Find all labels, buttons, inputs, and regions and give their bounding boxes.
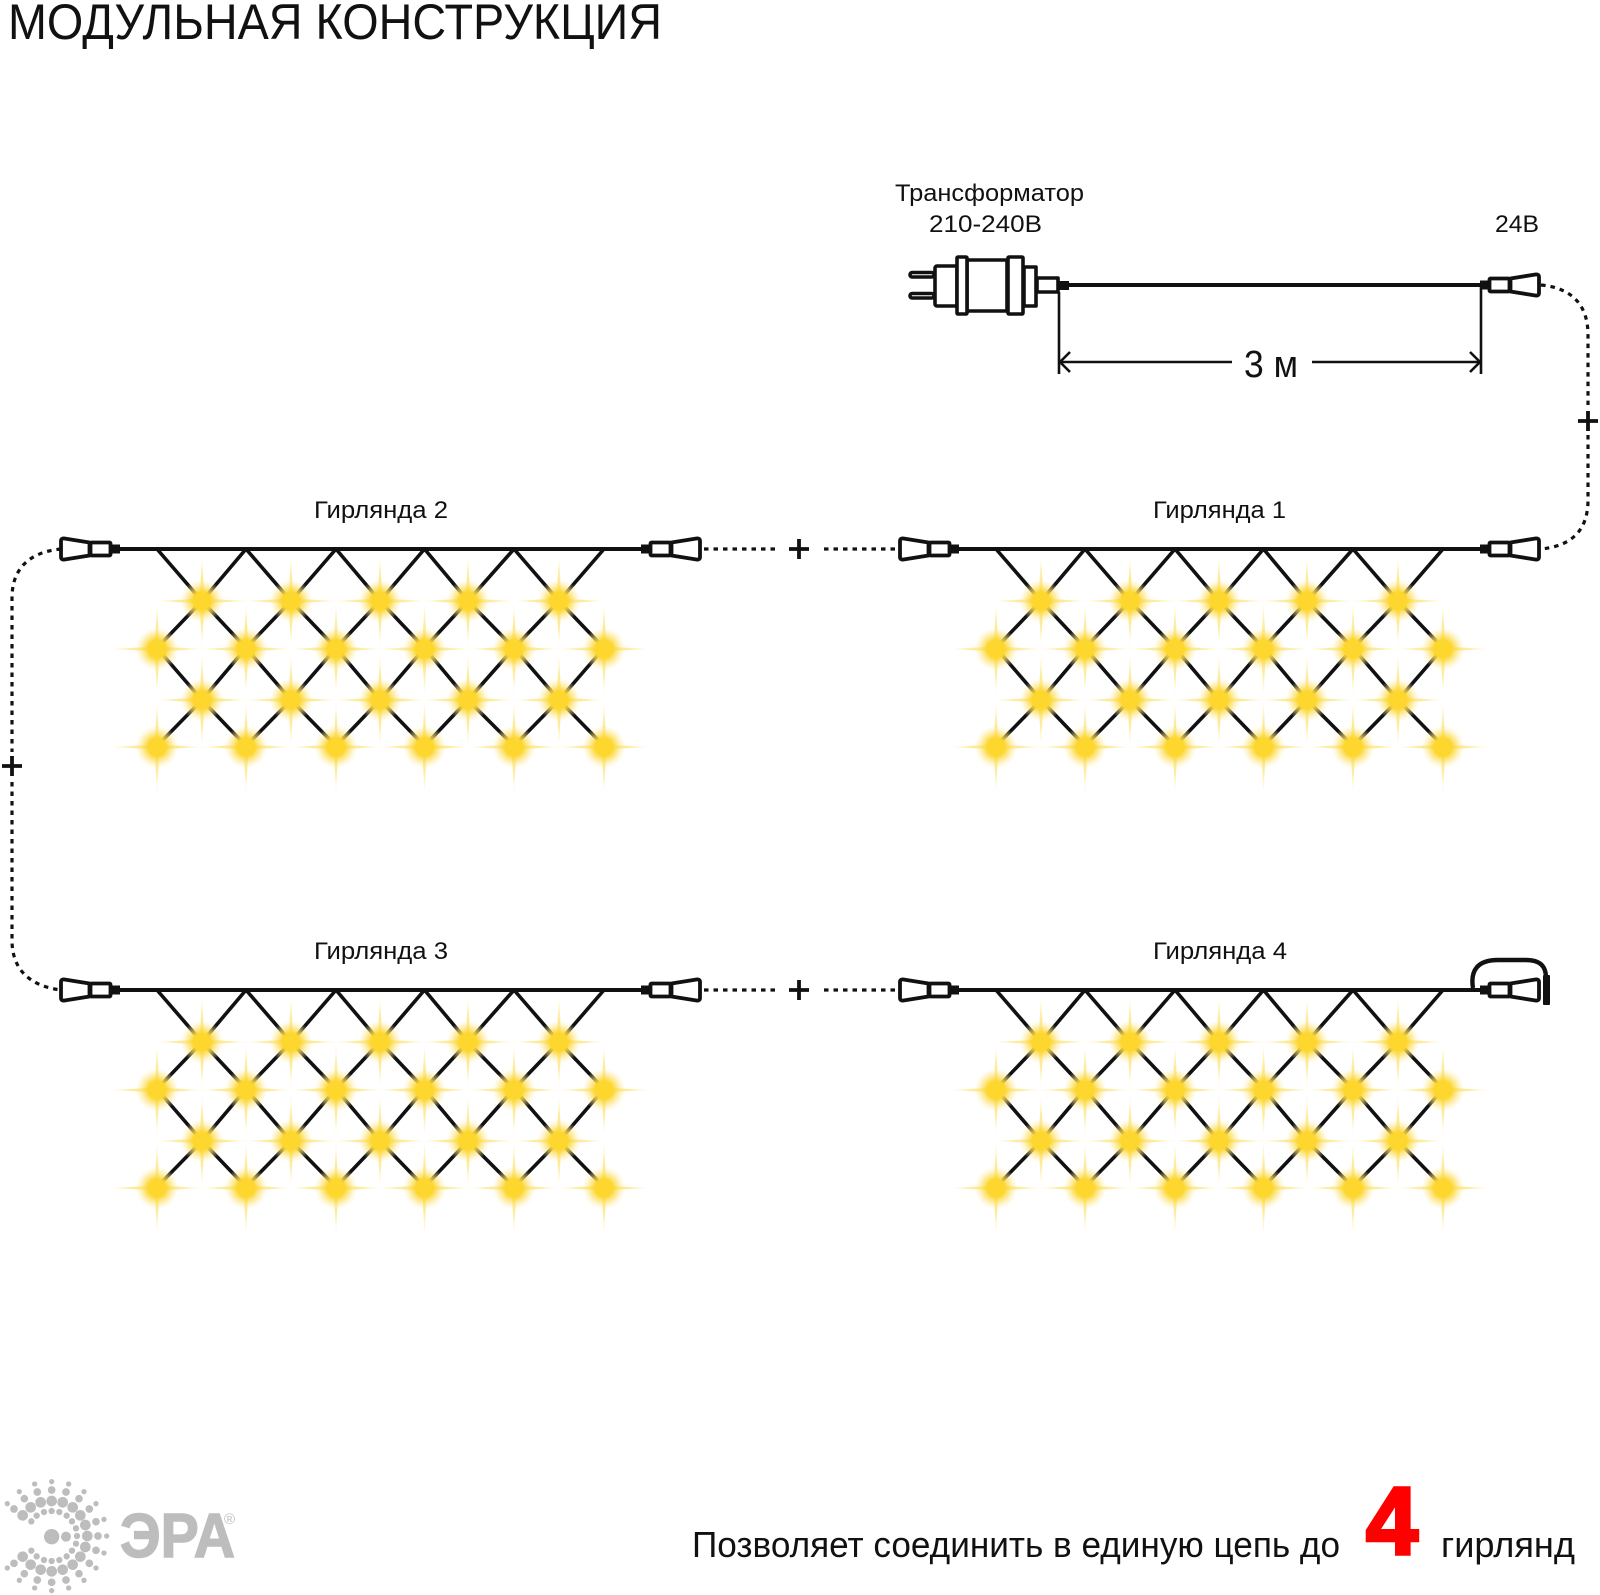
icon: transformer with plug <box>910 257 1069 314</box>
registered mark: ® <box>224 1511 235 1528</box>
garland 1 <box>900 538 1539 795</box>
bottom caption: Позволяет соединить в единую цепь до <box>692 1524 1340 1565</box>
logo dots <box>5 1479 109 1593</box>
voltage label 210-240V: 210-240В <box>929 211 1042 238</box>
big number 4: 4 <box>1366 1468 1418 1575</box>
garland 3 <box>61 979 700 1236</box>
plus signs <box>2 411 1598 1000</box>
caption end: гирлянд <box>1441 1524 1575 1565</box>
garland 1 label: Гирлянда 1 <box>1153 497 1286 524</box>
logo: ERA <box>5 1479 235 1593</box>
end plug bar <box>1543 975 1550 1005</box>
dimension 3 m <box>1059 287 1481 374</box>
dimension label: 3 м <box>1244 344 1298 386</box>
transformer label: Трансформатор <box>895 180 1084 207</box>
voltage label 24V: 24В <box>1495 211 1539 238</box>
garland 4 label: Гирлянда 4 <box>1153 938 1287 965</box>
logo wordmark: ЭРА <box>120 1502 235 1571</box>
garland 3 label: Гирлянда 3 <box>314 938 448 965</box>
dotted connections <box>12 285 1588 990</box>
garland 4 <box>900 979 1539 1236</box>
connector 24V <box>1480 274 1539 296</box>
3 m cable <box>1069 283 1481 287</box>
garland 2 label: Гирлянда 2 <box>314 497 448 524</box>
end cap on garland 4 <box>1472 960 1546 988</box>
garland 2 <box>61 538 700 795</box>
